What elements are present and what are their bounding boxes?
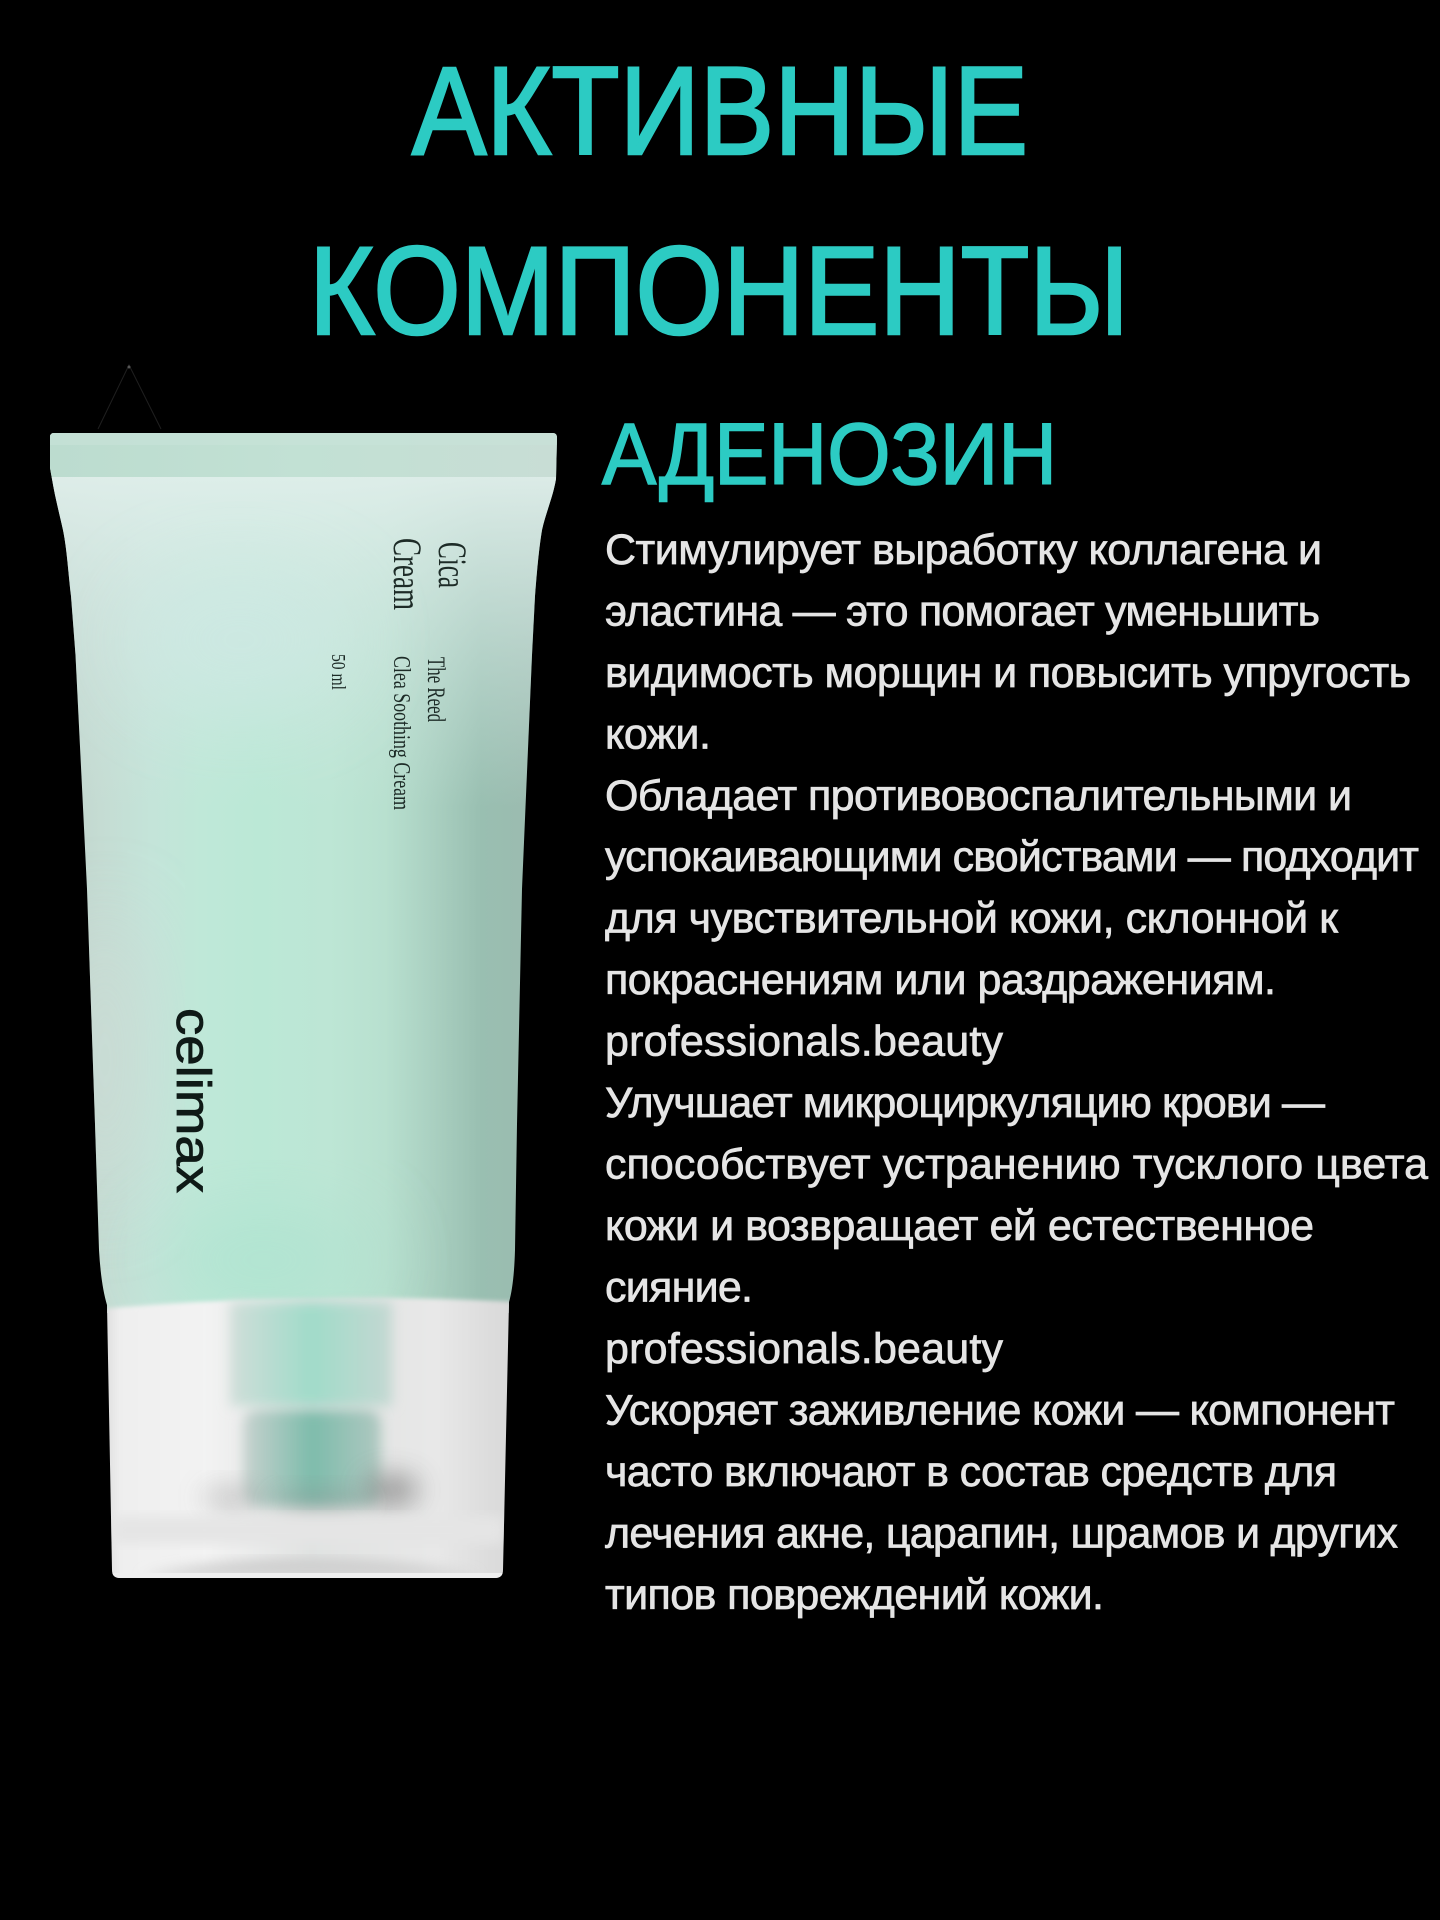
body text: Ускоряет заживление кожи — компонент	[605, 1386, 1395, 1434]
tube label: product name: 50 ml	[327, 654, 349, 690]
title: КОМПОНЕНТЫ	[309, 222, 1129, 361]
body text: покраснениям или раздражениям.	[605, 956, 1276, 1004]
tube cap	[100, 1298, 520, 1580]
body text: professionals.beauty	[605, 1018, 1004, 1066]
icon: small triangle outline above tube	[98, 365, 161, 429]
tube label: Cica Cream	[385, 538, 475, 610]
body text: часто включают в состав средств для	[605, 1448, 1337, 1496]
title: АКТИВНЫЕ	[412, 42, 1028, 181]
title	[309, 42, 1129, 361]
body text: Обладает противовоспалительными и	[605, 772, 1352, 820]
tube label: celimax logo: celimax	[166, 1008, 219, 1193]
body text: Стимулирует выработку коллагена и	[605, 526, 1322, 574]
body text: успокаивающими свойствами — подходит	[605, 833, 1419, 881]
tube label: product name	[327, 654, 449, 810]
tube label: Cica Cream: Cream	[385, 538, 430, 610]
tube label: product name: Clea Soothing Cream	[388, 656, 414, 810]
tube label: product name: The Reed	[422, 657, 449, 722]
tube label: Cica Cream: Cica	[430, 542, 475, 588]
product tube illustration	[50, 433, 557, 1580]
body text: сияние.	[605, 1264, 753, 1312]
body text: видимость морщин и повысить упругость	[605, 649, 1411, 697]
tube body	[50, 433, 557, 1313]
body text: эластина — это помогает уменьшить	[605, 588, 1320, 636]
body text: способствует устранению тусклого цвета	[605, 1140, 1428, 1188]
body text	[605, 526, 1428, 1619]
body text: professionals.beauty	[605, 1325, 1004, 1373]
body text: Улучшает микроциркуляцию крови —	[605, 1079, 1325, 1127]
body text: кожи и возвращает ей естественное	[605, 1202, 1314, 1250]
body text: кожи.	[605, 710, 711, 758]
heading: adenosine: АДЕНОЗИН	[602, 406, 1057, 503]
body text: типов повреждений кожи.	[605, 1571, 1104, 1619]
body text: лечения акне, царапин, шрамов и других	[605, 1510, 1398, 1558]
body text: для чувствительной кожи, склонной к	[605, 894, 1339, 942]
